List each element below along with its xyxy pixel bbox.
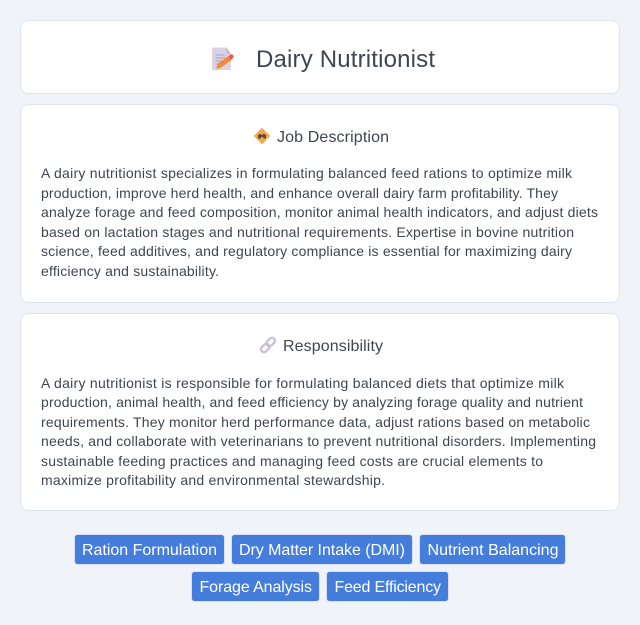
heading: job description: Job Description <box>277 129 389 146</box>
text block: job description: based on lactation stages and nutritional requirements. Expertise in bovine nutrition <box>41 224 574 240</box>
tag: forage analysis: Forage Analysis <box>200 579 312 596</box>
tag: forage analysis <box>192 572 320 602</box>
text block: job description: efficiency and sustainability. <box>41 263 219 279</box>
text block: responsibility: production, animal health, and feed efficiency by analyzing forage quality and nutrient <box>41 394 583 410</box>
tag: ration formulation: Ration Formulation <box>82 542 217 559</box>
tag: feed efficiency <box>326 572 448 602</box>
text block: responsibility: maximize profitability and environmental stewardship. <box>41 472 385 488</box>
text block: responsibility: requirements. They monitor herd performance data, adjust rations based on metabolic <box>41 414 590 430</box>
text block: job description <box>41 165 598 279</box>
icon: document with pencil <box>212 48 234 70</box>
tag: dry matter intake <box>232 534 412 564</box>
text block: responsibility <box>41 375 596 488</box>
tag: ration formulation <box>74 534 224 564</box>
text block: responsibility: needs, and collaborate with veterinarians to prevent nutritional disorders. Implementing <box>41 433 596 449</box>
tag: nutrient balancing: Nutrient Balancing <box>428 542 558 559</box>
tag: dry matter intake: Dry Matter Intake (DMI) <box>239 542 405 559</box>
heading: responsibility: Responsibility <box>283 338 383 355</box>
text block: responsibility: sustainable feeding practices and managing feed costs are crucial elements to <box>41 453 543 469</box>
panel: job description <box>20 104 620 302</box>
panel: header <box>20 20 620 94</box>
text block: job description: A dairy nutritionist specializes in formulating balanced feed rations to optimize milk <box>41 165 573 181</box>
icon: orange diamond <box>255 129 269 143</box>
text block: job description: analyze forage and feed composition, monitor animal health indicators, and adjust diets <box>41 204 598 220</box>
tag group <box>74 534 566 602</box>
text block: responsibility: A dairy nutritionist is responsible for formulating balanced diets that optimize milk <box>41 375 565 391</box>
tag: nutrient balancing <box>420 534 566 564</box>
title: Dairy Nutritionist <box>256 46 435 73</box>
text block: job description: production, improve herd health, and enhance overall dairy farm profitability. They <box>41 185 558 201</box>
panel: responsibility <box>20 314 620 510</box>
tag: feed efficiency: Feed Efficiency <box>334 579 441 596</box>
icon: chain link <box>260 337 276 353</box>
text block: job description: science, feed additives, and regulatory compliance is essential for maximizing dairy <box>41 243 572 259</box>
